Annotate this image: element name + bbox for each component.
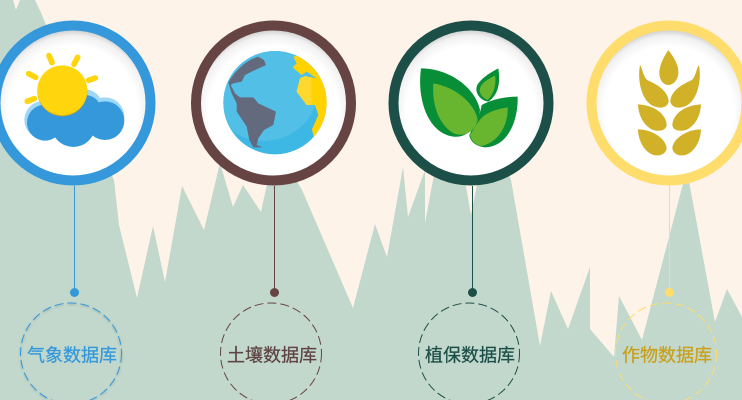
dot: crop (665, 288, 674, 297)
dashed circle: crop (616, 303, 716, 400)
ring: soil (196, 26, 351, 180)
panel: soil database (196, 26, 351, 400)
dashed circle: plant protection (418, 303, 520, 400)
icon: leaves (420, 68, 518, 147)
icon: sun and cloud (24, 56, 124, 147)
dot: plant protection (468, 288, 477, 297)
dashed circle: weather (20, 303, 122, 400)
connector line: crop (668, 186, 670, 292)
label: crop: 作物数据库 (622, 346, 712, 366)
ring: weather (0, 26, 150, 180)
connector line: soil (274, 186, 276, 292)
panel: crop database (592, 26, 742, 400)
label: soil: 土壤数据库 (227, 346, 317, 366)
panel: plant protection database (394, 26, 548, 400)
icon: wheat (638, 50, 701, 155)
panel: weather database (0, 26, 150, 400)
connector line: plant protection (472, 186, 474, 292)
dashed circle: soil (220, 303, 322, 400)
ring: plant protection (394, 26, 548, 180)
icon: globe (223, 51, 327, 154)
label: weather: 气象数据库 (27, 346, 117, 366)
dot: soil (270, 288, 279, 297)
ring: crop (592, 26, 742, 180)
label: plant protection: 植保数据库 (425, 346, 515, 366)
connector line: weather (74, 186, 76, 292)
dot: weather (70, 288, 79, 297)
